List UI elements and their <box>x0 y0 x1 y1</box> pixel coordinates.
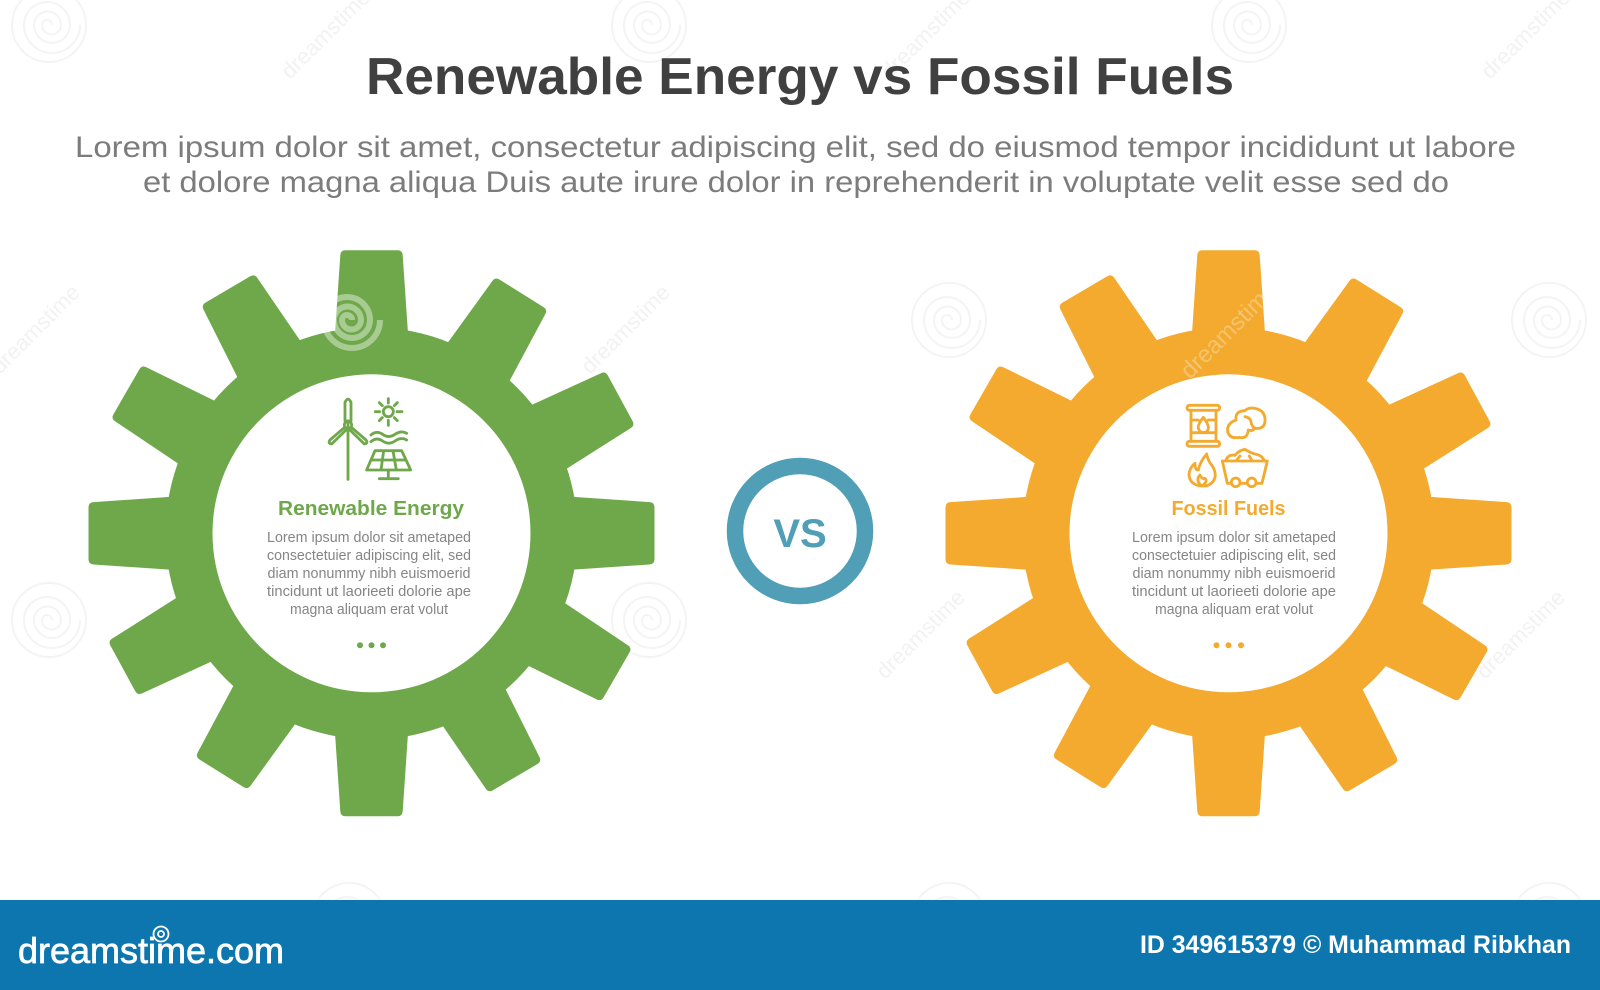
watermark spiral on green gear <box>324 297 380 348</box>
text block: fossil description: magna aliquam erat volut <box>1155 602 1313 618</box>
text block: renewable description: magna aliquam erat volut <box>290 602 448 618</box>
green gear shape <box>88 250 655 816</box>
text block: renewable description: diam nonummy nibh euismoerid <box>268 566 470 582</box>
heading: renewable energy: Renewable Energy <box>278 498 465 520</box>
text block: fossil description: diam nonummy nibh euismoerid <box>1132 566 1336 582</box>
dots: green <box>357 642 386 648</box>
text block: renewable description <box>267 530 471 618</box>
icon: barrel, cloud, flame and coal cart <box>1187 405 1267 487</box>
orange gear shape <box>946 250 1512 816</box>
background watermark text: dreamstime <box>871 585 970 684</box>
watermark text on orange gear: dreamstime <box>1175 276 1283 384</box>
panel: fossil fuels gear <box>946 250 1512 816</box>
title: Renewable Energy vs Fossil Fuels <box>366 48 1234 106</box>
footer logo text: dreamstime.com <box>18 930 284 971</box>
text block: renewable description: tincidunt ut laorieeti dolorie ape <box>267 584 471 600</box>
subtitle: Lorem ipsum dolor sit amet, consectetur adipiscing elit, sed do eiusmod tempor incididunt ut labore <box>75 131 1516 164</box>
dots: orange <box>1214 642 1244 648</box>
vs badge <box>735 466 865 596</box>
text block: fossil description: Lorem ipsum dolor sit ametaped <box>1132 530 1336 546</box>
footer credit: ID 349615379 © Muhammad Ribkhan <box>1140 931 1571 959</box>
heading: fossil fuels: Fossil Fuels <box>1172 498 1286 520</box>
background watermark text <box>0 0 1575 684</box>
text block: renewable description: consectetuier adipiscing elit, sed <box>267 548 471 564</box>
icon: logo spiral <box>154 926 168 942</box>
subtitle: et dolore magna aliqua Duis aute irure dolor in reprehenderit in voluptate velit esse sed do <box>143 166 1449 199</box>
icon: wind turbine, sun and solar panel <box>329 399 411 479</box>
text block: renewable description: Lorem ipsum dolor sit ametaped <box>267 530 471 546</box>
background watermark text: dreamstime <box>1471 585 1570 684</box>
background watermark text: dreamstime <box>576 280 675 379</box>
footer band <box>0 900 1600 990</box>
panel: renewable energy gear <box>88 250 655 816</box>
text block: fossil description <box>1132 530 1336 618</box>
vs badge: VS <box>773 512 827 556</box>
subtitle <box>75 131 1516 199</box>
text block: fossil description: consectetuier adipiscing elit, sed <box>1132 548 1336 564</box>
text block: fossil description: tincidunt ut laorieeti dolorie ape <box>1132 584 1336 600</box>
